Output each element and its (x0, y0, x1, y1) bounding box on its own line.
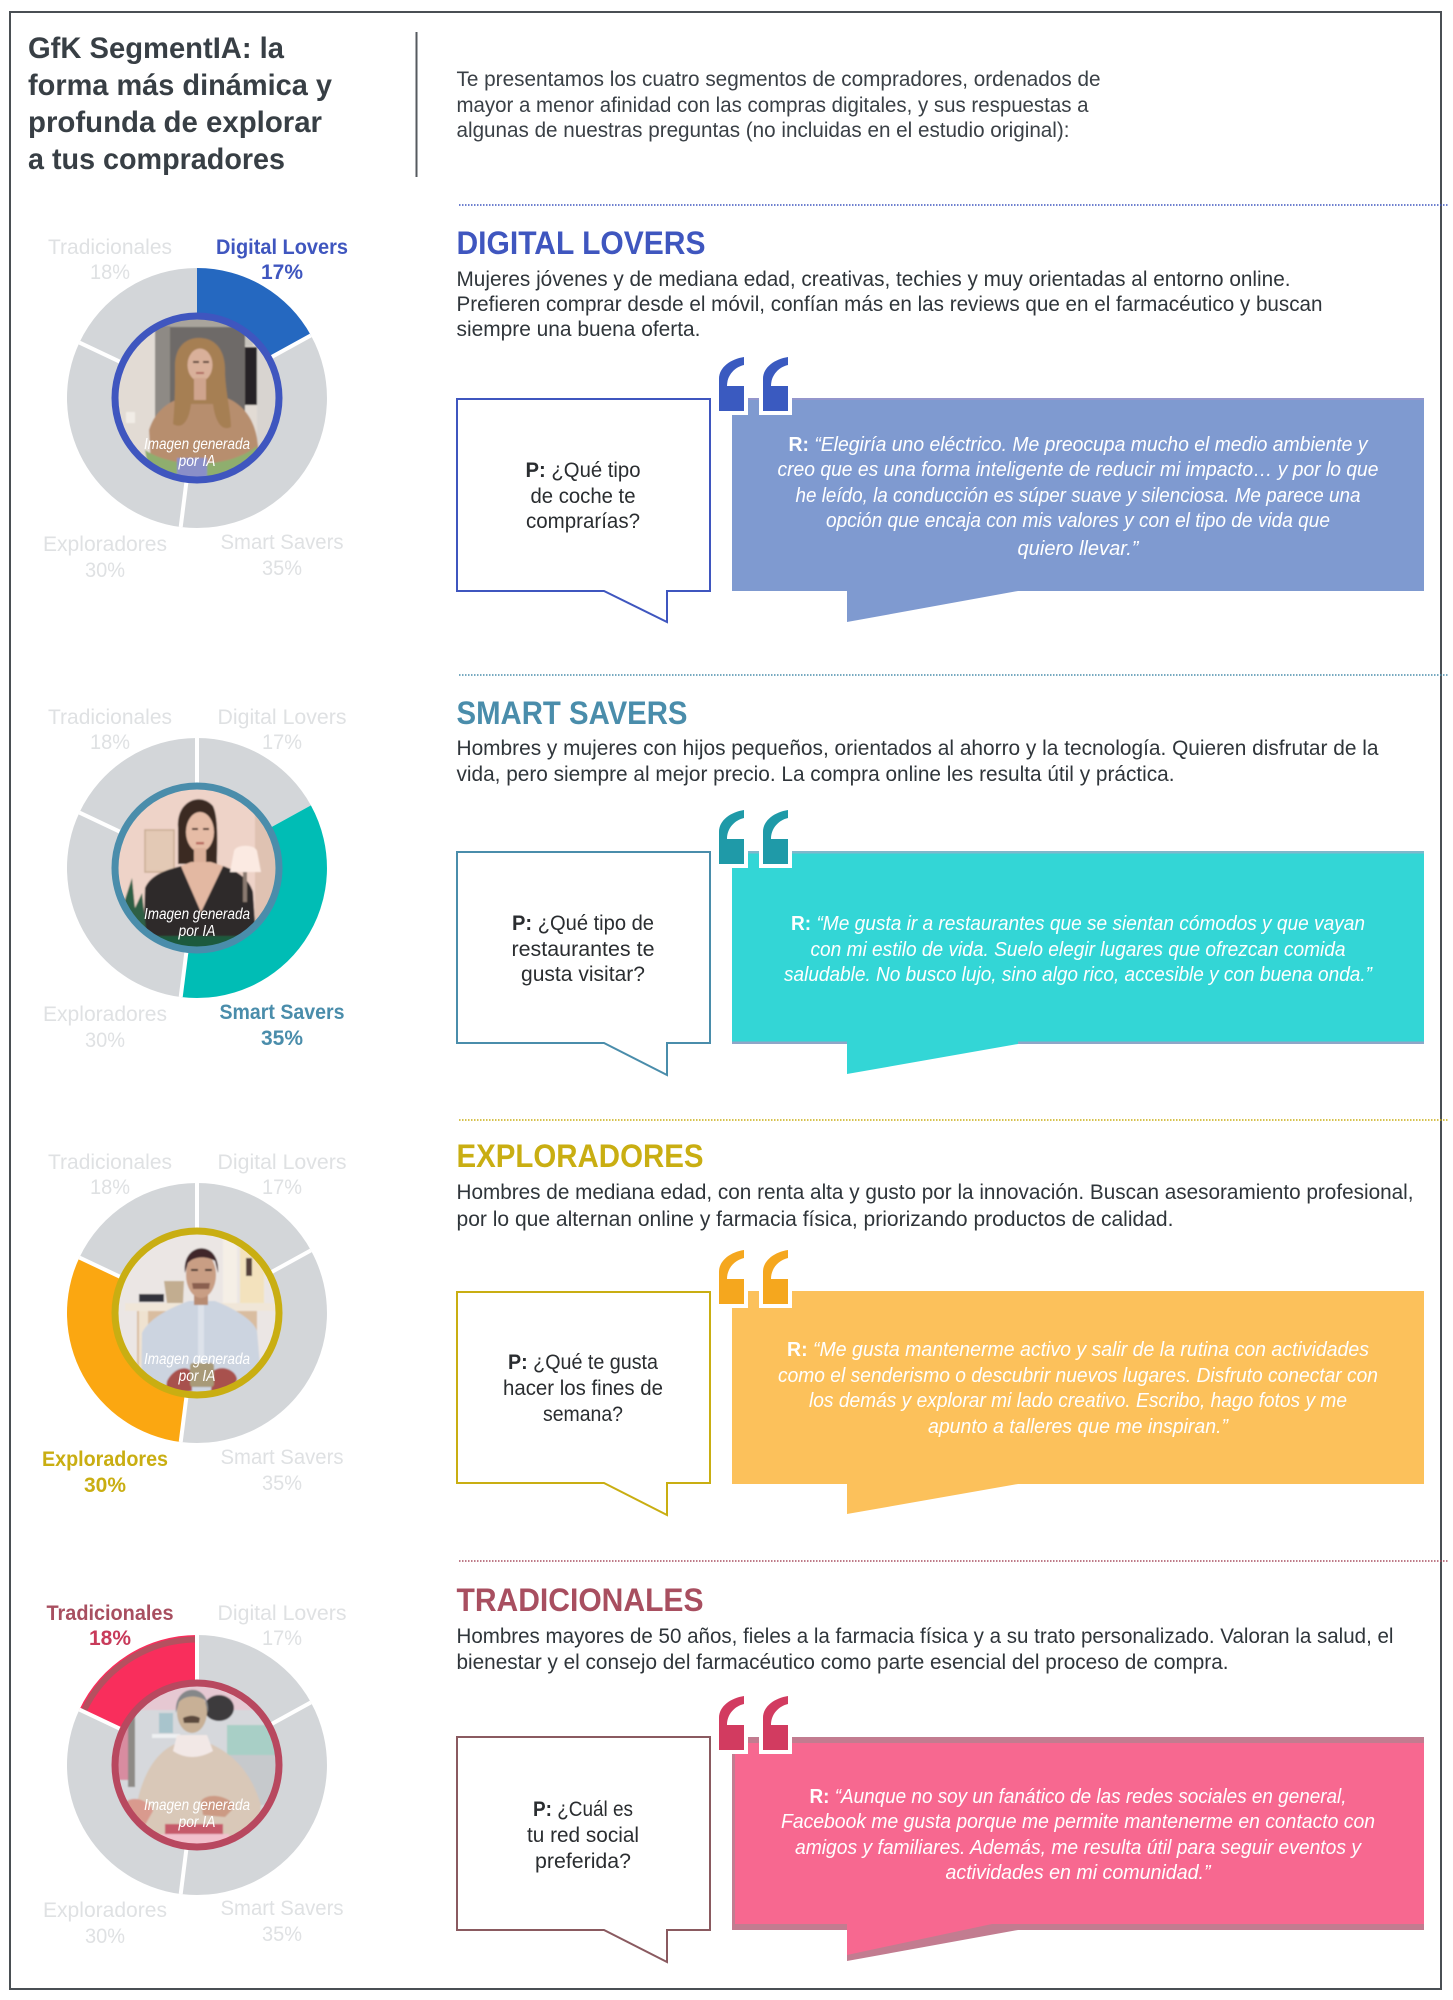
donut labels: Smart Savers (220, 1446, 344, 1469)
answer bubble: Facebook me gusta porque me permite mantenerme en contacto con (781, 1810, 1375, 1833)
donut labels: 18% (89, 1627, 131, 1650)
donut labels: Tradicionales (48, 706, 172, 729)
description: digital lovers (456, 268, 1322, 341)
donut labels (43, 1602, 346, 1948)
donut chart: tradicionales 18% (67, 1635, 327, 1895)
intro text: mayor a menor afinidad con las compras digitales, y sus respuestas a (456, 94, 1089, 117)
description: smart savers (456, 737, 1379, 786)
answer bubble (732, 1737, 1424, 1961)
portrait: AI generated woman with long blonde hair: por IA (178, 453, 216, 470)
question bubble (457, 399, 710, 622)
answer bubble (732, 398, 1424, 622)
answer bubble: amigos y familiares. Además, me resulta útil para seguir eventos y (795, 1836, 1363, 1859)
donut chart: smart savers 35% (67, 738, 327, 998)
donut labels: 30% (85, 1029, 125, 1052)
donut labels: 30% (84, 1474, 126, 1497)
question bubble: restaurantes te (512, 938, 654, 961)
question bubble: P: ¿Qué te gusta (508, 1351, 658, 1374)
question bubble: hacer los fines de (503, 1377, 663, 1400)
description: tradicionales (456, 1625, 1394, 1674)
donut labels: 17% (261, 261, 303, 284)
donut labels: Tradicionales (48, 236, 172, 259)
description: digital lovers: Prefieren comprar desde el móvil, confían más en las reviews que en el farmacéutico y buscan (456, 293, 1322, 316)
description: exploradores: Hombres de mediana edad, con renta alta y gusto por la innovación. Buscan asesoramiento profesional, (456, 1181, 1414, 1204)
question bubble: comprarías? (526, 510, 640, 533)
heading: exploradores: EXPLORADORES (456, 1138, 704, 1174)
description: digital lovers: Mujeres jóvenes y de mediana edad, creativas, techies y muy orientadas al entorno online. (456, 268, 1290, 291)
donut labels: Smart Savers (220, 531, 344, 554)
question bubble: tu red social (527, 1824, 639, 1847)
donut labels: Smart Savers (220, 1897, 344, 1920)
donut labels (43, 706, 346, 1052)
donut chart: exploradores 30% (67, 1183, 327, 1443)
donut labels: Exploradores (43, 533, 167, 556)
donut labels: 18% (90, 731, 130, 754)
donut labels: Tradicionales (46, 1602, 174, 1625)
donut labels: 18% (90, 261, 130, 284)
description: tradicionales: Hombres mayores de 50 años, fieles a la farmacia física y a su trato personalizado. Valoran la salud, el (456, 1625, 1394, 1648)
portrait: AI generated man in white shirt: Imagen generada (144, 1351, 250, 1368)
panel: tradicionales (43, 1561, 1448, 1962)
heading: tradicionales: TRADICIONALES (456, 1582, 704, 1618)
question bubble: P: ¿Qué tipo (526, 459, 640, 482)
description: smart savers: Hombres y mujeres con hijos pequeños, orientados al ahorro y la tecnología. Quieren disfrutar de la (456, 737, 1379, 760)
portrait: AI generated man in white shirt: por IA (178, 1368, 216, 1385)
description: exploradores: por lo que alternan online y farmacia física, priorizando productos de calidad. (456, 1208, 1174, 1231)
portrait: AI generated older man in beige sweater (112, 1680, 282, 1850)
question bubble: preferida? (535, 1850, 631, 1873)
answer bubble: saludable. No busco lujo, sino algo rico, accesible y con buena onda.” (784, 963, 1373, 986)
donut labels: Exploradores (43, 1003, 167, 1026)
intro text: algunas de nuestras preguntas (no incluidas en el estudio original): (456, 119, 1070, 142)
donut labels: 30% (85, 559, 125, 582)
answer bubble: quiero llevar.” (1018, 537, 1140, 560)
header title: GfK SegmentIA: la (28, 32, 284, 65)
description: digital lovers: siempre una buena oferta. (456, 318, 700, 341)
donut labels: 35% (261, 1027, 303, 1050)
donut labels: Exploradores (42, 1448, 168, 1471)
donut labels: 35% (262, 1472, 302, 1495)
answer bubble: actividades en mi comunidad.” (946, 1861, 1212, 1884)
donut labels: Tradicionales (48, 1151, 172, 1174)
donut labels: 35% (262, 557, 302, 580)
answer bubble: R: “Me gusta ir a restaurantes que se sientan cómodos y que vayan (791, 912, 1365, 935)
question bubble (457, 1737, 710, 1962)
heading: smart savers: SMART SAVERS (456, 695, 688, 731)
donut labels (43, 236, 348, 582)
answer bubble (732, 851, 1424, 1074)
answer bubble: R: “Me gusta mantenerme activo y salir de la rutina con actividades (787, 1338, 1369, 1361)
portrait: AI generated woman with dark hair (112, 783, 282, 953)
question bubble: de coche te (530, 485, 636, 508)
icon: quotation marks (719, 1696, 788, 1750)
donut labels: 35% (262, 1923, 302, 1946)
answer bubble: he leído, la conducción es súper suave y silenciosa. Me parece una (796, 484, 1360, 507)
intro text (456, 68, 1100, 142)
answer bubble (732, 1291, 1424, 1514)
intro text: Te presentamos los cuatro segmentos de compradores, ordenados de (456, 68, 1100, 91)
answer bubble: R: “Aunque no soy un fanático de las redes sociales en general, (810, 1785, 1346, 1808)
donut labels: Digital Lovers (216, 236, 348, 259)
answer bubble: creo que es una forma inteligente de reducir mi impacto… y por lo que (778, 458, 1378, 481)
donut labels: Exploradores (43, 1899, 167, 1922)
portrait: AI generated woman with dark hair: por IA (178, 923, 216, 940)
icon: quotation marks (719, 357, 788, 411)
question bubble: P: ¿Qué tipo de (512, 912, 654, 935)
header title: profunda de explorar (28, 106, 322, 139)
answer bubble: R: “Elegiría uno eléctrico. Me preocupa mucho el medio ambiente y (788, 433, 1369, 456)
answer bubble: apunto a talleres que me inspiran.” (928, 1415, 1229, 1438)
donut labels: 17% (262, 1176, 302, 1199)
icon: quotation marks (719, 810, 788, 864)
heading: digital lovers: DIGITAL LOVERS (456, 225, 706, 261)
portrait: AI generated man in white shirt (112, 1228, 282, 1401)
portrait: AI generated older man in beige sweater: Imagen generada (144, 1797, 250, 1814)
donut labels: Digital Lovers (218, 1151, 346, 1174)
header divider (416, 32, 418, 177)
donut labels: 17% (262, 1627, 302, 1650)
portrait: AI generated woman with long blonde hair (112, 313, 282, 483)
donut labels (42, 1151, 346, 1497)
donut labels: 18% (90, 1176, 130, 1199)
donut labels: Digital Lovers (218, 706, 346, 729)
description: tradicionales: bienestar y el consejo del farmacéutico como parte esencial del proceso de compra. (456, 1651, 1228, 1674)
panel: smart savers (43, 675, 1448, 1075)
panel: digital lovers (43, 205, 1448, 622)
panel: exploradores (42, 1120, 1448, 1515)
header title (28, 32, 332, 176)
description: exploradores (456, 1181, 1414, 1231)
donut labels: 30% (85, 1925, 125, 1948)
question bubble: P: ¿Cuál es (533, 1798, 633, 1821)
icon: quotation marks (719, 1250, 788, 1304)
portrait: AI generated woman with long blonde hair: Imagen generada (144, 436, 250, 453)
header title: a tus compradores (28, 143, 285, 176)
header title: forma más dinámica y (28, 69, 332, 102)
donut labels: Smart Savers (220, 1001, 344, 1024)
answer bubble: los demás y explorar mi lado creativo. Escribo, hago fotos y me (809, 1389, 1347, 1412)
answer bubble: con mi estilo de vida. Suelo elegir lugares que ofrezcan comida (810, 938, 1346, 961)
portrait: AI generated woman with dark hair: Imagen generada (144, 906, 250, 923)
donut labels: Digital Lovers (218, 1602, 346, 1625)
description: smart savers: vida, pero siempre al mejor precio. La compra online les resulta útil y práctica. (456, 763, 1174, 786)
donut chart: digital lovers 17% (67, 268, 327, 528)
question bubble (457, 852, 710, 1075)
question bubble: semana? (543, 1403, 623, 1426)
answer bubble: opción que encaja con mis valores y con el tipo de vida que (826, 509, 1330, 532)
question bubble (457, 1292, 710, 1515)
answer bubble: como el senderismo o descubrir nuevos lugares. Disfruto conectar con (778, 1364, 1378, 1387)
question bubble: gusta visitar? (521, 963, 645, 986)
portrait: AI generated older man in beige sweater: por IA (178, 1814, 216, 1831)
donut labels: 17% (262, 731, 302, 754)
